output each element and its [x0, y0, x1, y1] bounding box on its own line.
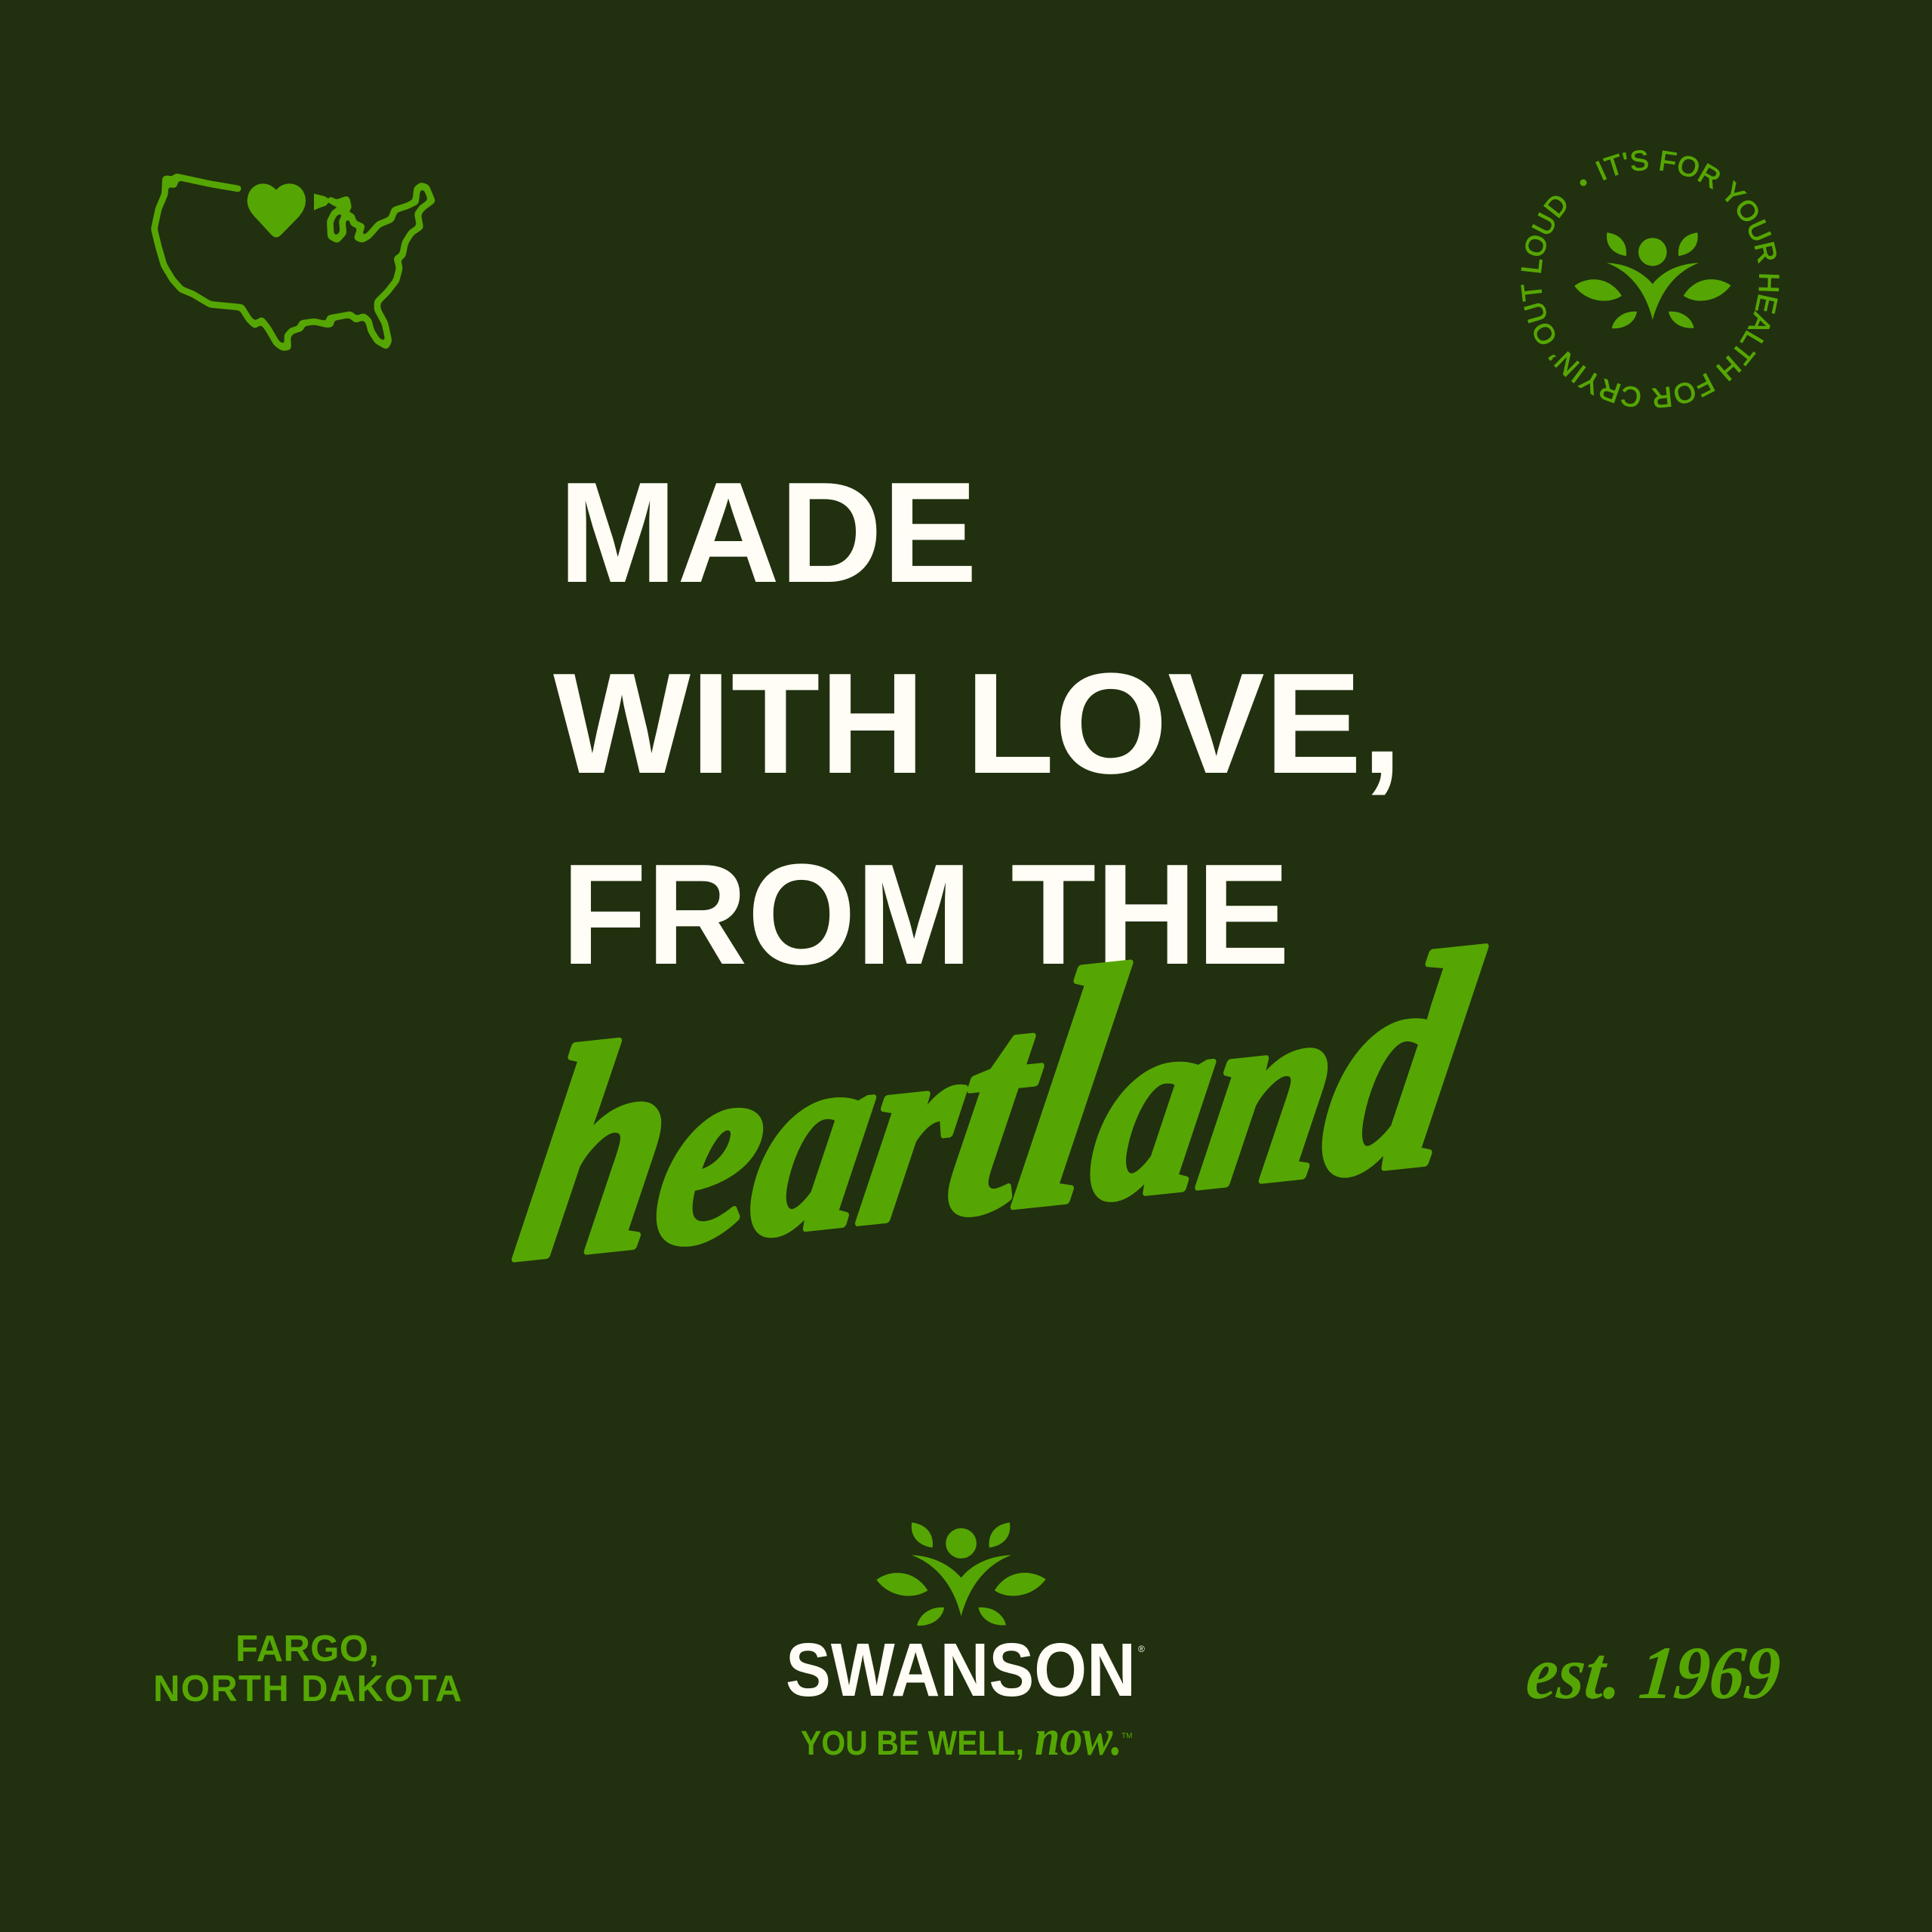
headline — [553, 453, 1402, 995]
headline line 3: FROM THE — [561, 835, 1290, 995]
registered mark: ® — [1138, 1644, 1145, 1654]
circular badge — [1521, 149, 1780, 408]
badge dot separator — [1580, 180, 1586, 186]
badge logo mark — [1574, 232, 1730, 328]
headline line 2: WITH LOVE, — [553, 644, 1402, 804]
tagline script: now. — [1035, 1709, 1122, 1766]
location line 2: NORTH DAKOTA — [153, 1669, 462, 1709]
icon: USA map outline with heart — [154, 177, 432, 348]
logo mark — [876, 1522, 1046, 1626]
map outline — [154, 177, 432, 348]
wordmark: SWANSON — [786, 1628, 1136, 1712]
trademark: TM — [1121, 1732, 1132, 1740]
location line 1: FARGO, — [235, 1629, 379, 1669]
Swanson logo lockup — [786, 1522, 1145, 1766]
badge circular slogan: IT'S FOR YOUR HEALTH FOR CRYIN’ OUT LOUD — [1521, 149, 1780, 408]
tagline: YOU BE WELL, — [801, 1724, 1024, 1762]
established date: est. 1969 — [1523, 1631, 1784, 1715]
heart — [248, 183, 306, 237]
map upper peninsula wedge — [314, 194, 331, 211]
headline line 1: MADE — [558, 453, 977, 613]
script word: heartland: heartland — [496, 860, 1503, 1332]
location text — [153, 1629, 462, 1709]
